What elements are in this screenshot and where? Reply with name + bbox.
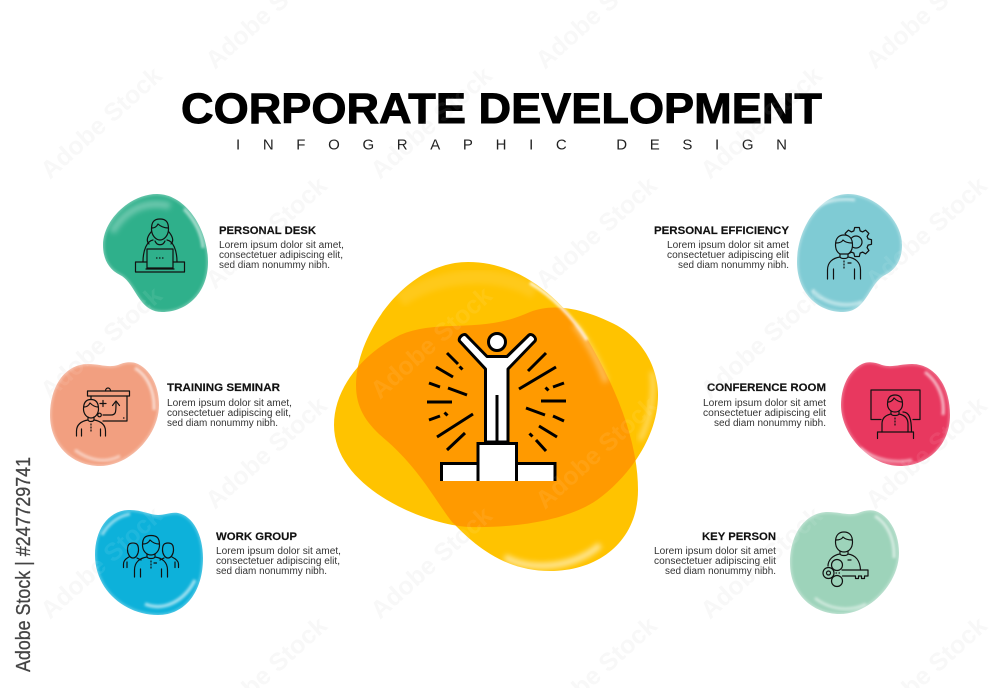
blob: red <box>841 362 950 466</box>
panel: personal desk <box>103 194 344 312</box>
icon: speaker at lectern <box>871 390 920 438</box>
text block: Lorem ipsum dolor sit amet <box>654 546 776 557</box>
blob: blue <box>95 510 203 615</box>
heading: CONFERENCE ROOM <box>707 382 826 394</box>
heading: PERSONAL DESK <box>219 225 316 237</box>
panel: personal efficiency <box>654 194 902 312</box>
text block <box>216 546 341 577</box>
text block: consectetuer adipiscing elit <box>667 250 789 261</box>
icon: winner figure <box>459 335 535 442</box>
text block: sed diam nonummy nibh. <box>678 260 789 271</box>
text block <box>703 398 826 429</box>
icon: celebration rays <box>427 353 566 451</box>
text block: Lorem ipsum dolor sit amet, <box>219 240 344 251</box>
text block: sed diam nonummy nibh. <box>714 418 826 429</box>
text block: Lorem ipsum dolor sit amet, <box>216 546 341 557</box>
icon: podium <box>442 464 555 481</box>
panel: work group <box>95 510 341 615</box>
text block <box>667 240 789 271</box>
icon: person on podium <box>427 334 566 481</box>
icon: person at laptop <box>136 219 184 272</box>
blob: mint <box>790 510 899 614</box>
text block: sed diam nonummy nibh. <box>219 260 330 271</box>
icon: person with gear <box>828 228 871 279</box>
subtitle: INFOGRAPHIC DESIGN <box>236 136 787 154</box>
panel: training seminar <box>50 362 292 466</box>
text block <box>219 240 344 271</box>
heading: TRAINING SEMINAR <box>167 382 280 394</box>
text block: consectetuer adipiscing elit, <box>216 556 340 567</box>
text block: consectetuer adipiscing elit <box>703 408 826 419</box>
text block: sed diam nonummy nibh. <box>216 566 327 577</box>
icon: person with key <box>823 532 868 586</box>
heading: PERSONAL EFFICIENCY <box>654 225 790 237</box>
heading: WORK GROUP <box>216 531 297 543</box>
text block: sed diam nonummy nibh. <box>665 566 776 577</box>
blob: teal <box>797 194 902 312</box>
text block: consectetuer adipiscing elit <box>654 556 776 567</box>
text block <box>167 398 292 429</box>
stock credit: Adobe Stock | #247729741 <box>13 457 35 672</box>
blob: green <box>103 194 208 312</box>
heading: KEY PERSON <box>702 531 776 543</box>
text block: Lorem ipsum dolor sit amet <box>703 398 826 409</box>
text block: sed diam nonummy nibh. <box>167 418 278 429</box>
title: CORPORATE DEVELOPMENT <box>181 85 822 133</box>
panel: conference room <box>703 362 950 466</box>
blob: salmon <box>50 362 159 466</box>
text block: consectetuer adipiscing elit, <box>219 250 343 261</box>
text block: consectetuer adipiscing elit, <box>167 408 291 419</box>
text block: Lorem ipsum dolor sit amet <box>667 240 789 251</box>
central blob graphic <box>334 262 658 571</box>
icon: presenter with board <box>76 388 130 436</box>
icon: three people <box>124 536 178 577</box>
text block <box>654 546 776 577</box>
text block: Lorem ipsum dolor sit amet, <box>167 398 292 409</box>
panel: key person <box>654 510 899 614</box>
